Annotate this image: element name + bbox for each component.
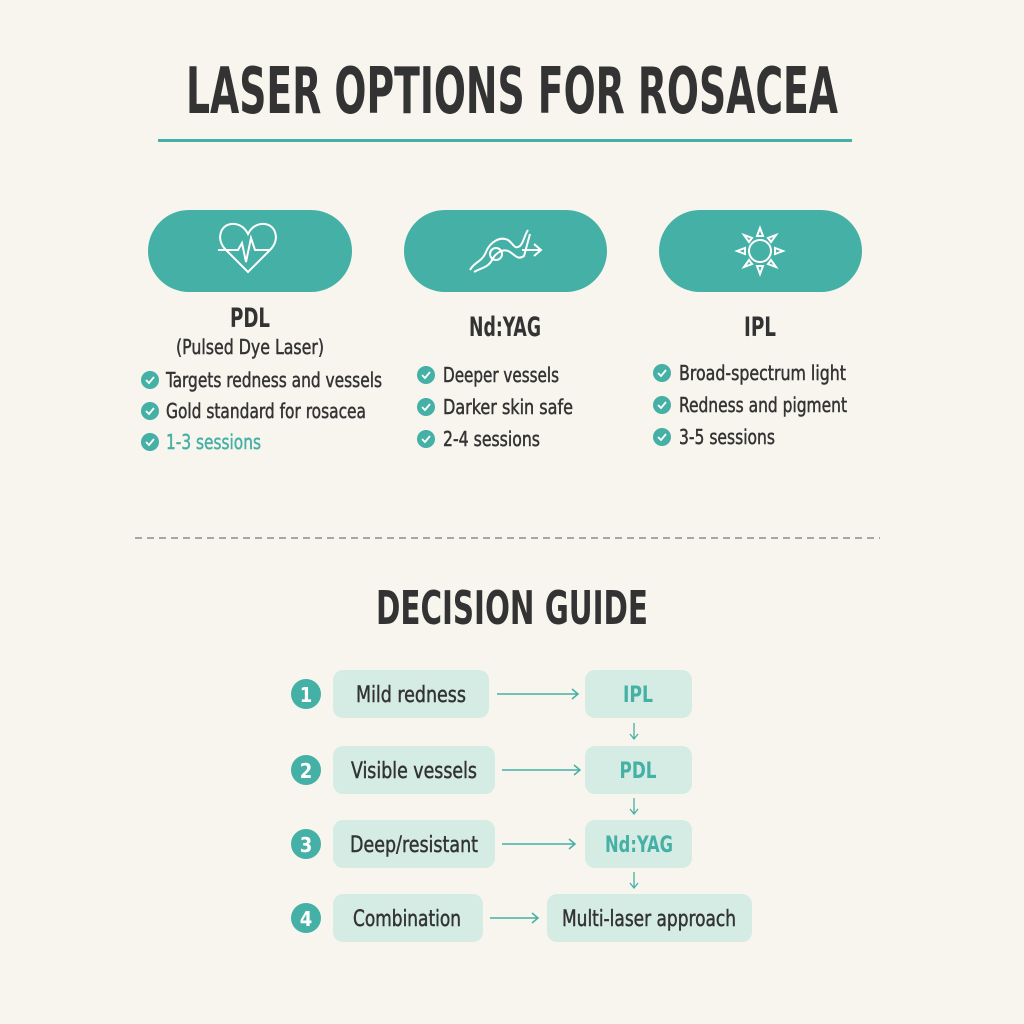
row 4 [291,894,752,942]
heading: Nd:YAG: Nd:YAG [469,312,541,343]
row 2: PDL [620,759,657,784]
icon: sun pill [659,210,862,292]
heading: decision guide: DECISION GUIDE [376,581,648,635]
bullets: Nd:YAG: Deeper vessels [443,363,559,387]
row 4: Combination [353,907,461,932]
row 1 [291,670,692,718]
panel: PDL [141,210,382,454]
row 1: 1 [300,683,312,707]
bullets: IPL: Broad-spectrum light [679,361,846,385]
bullets: IPL: 3-5 sessions [679,425,775,449]
title [158,55,852,142]
panel: Nd:YAG [404,210,607,451]
bullets: Nd:YAG [417,363,573,451]
row 2 [291,746,692,794]
row 3: 3 [300,833,312,857]
flowchart: decision guide [291,670,752,942]
bullets: Nd:YAG: 2-4 sessions [443,427,540,451]
bullets: PDL: Targets redness and vessels [165,368,382,392]
row 2: Visible vessels [351,759,477,784]
bullets: PDL: 1-3 sessions [166,430,261,454]
heading: IPL: IPL [744,312,776,343]
icon: vessel pill [404,210,607,292]
icon: heart pill [148,210,352,292]
row 3 [291,820,692,868]
bullets: IPL [653,361,847,449]
row 1: IPL [623,683,653,708]
row 2: 2 [300,759,312,783]
panel: IPL [653,210,862,449]
bullets: PDL: Gold standard for rosacea [166,399,366,423]
bullets: IPL: Redness and pigment [679,393,847,417]
panel: PDL: (Pulsed Dye Laser) [176,335,324,359]
bullets: PDL [141,368,382,454]
heading: PDL: PDL [230,303,270,334]
row 4: Multi-laser approach [562,907,736,932]
row 3: Nd:YAG [605,833,673,858]
bullets: Nd:YAG: Darker skin safe [443,395,573,419]
row 4: 4 [300,907,312,931]
row 3: Deep/resistant [350,833,478,858]
row 1: Mild redness [356,683,466,708]
